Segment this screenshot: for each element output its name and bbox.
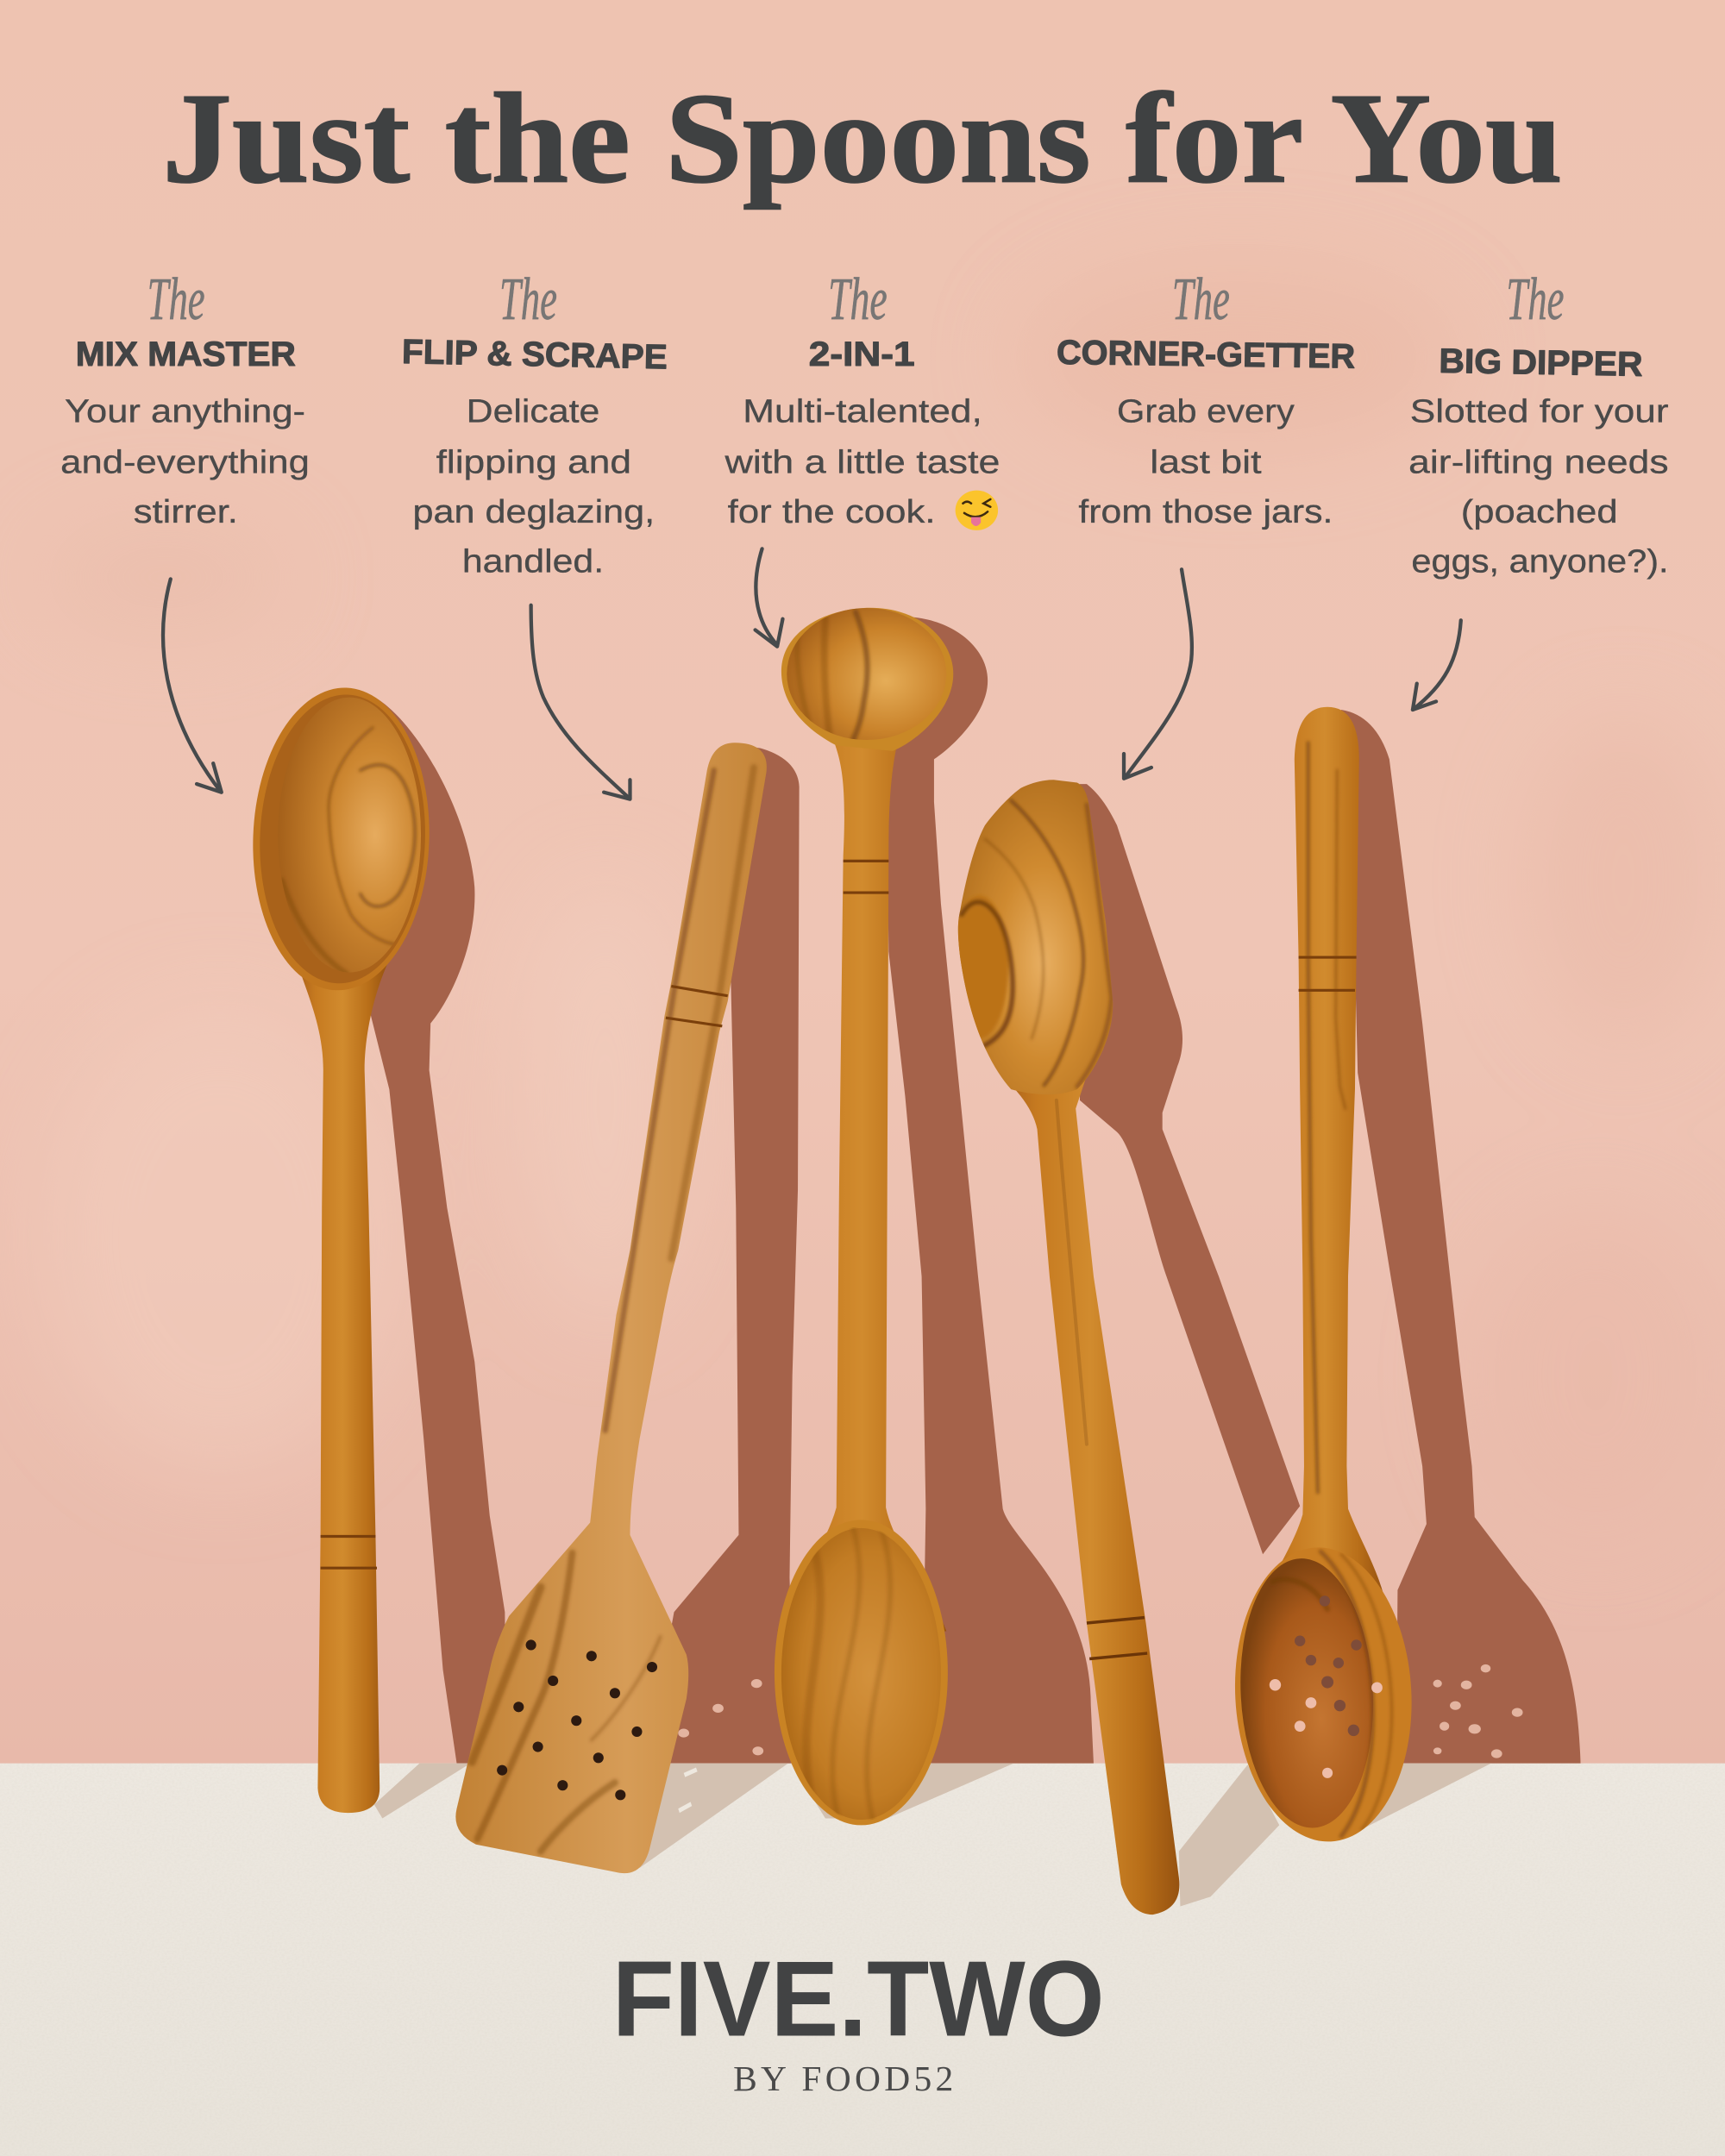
title: Just the Spoons for You (162, 67, 1563, 210)
description: handled. (462, 542, 604, 580)
handle (1001, 1075, 1179, 1915)
description (724, 393, 1000, 530)
description: eggs, anyone?). (1411, 542, 1669, 580)
name: CORNER-GETTER (1057, 334, 1355, 376)
handle grooves (1087, 1618, 1147, 1658)
spatula grain (472, 768, 754, 1852)
arrow: mix master (163, 579, 222, 793)
handle grooves (321, 1536, 377, 1568)
column: two in one (724, 266, 1000, 530)
bowl (248, 685, 435, 993)
cloth weave texture (0, 1764, 1725, 2156)
spoon: flip and scrape spatula (455, 743, 767, 1873)
column: corner getter (1057, 266, 1355, 530)
description (1408, 393, 1669, 580)
description: and-everything (60, 444, 310, 481)
cloth shadow: corner getter (1179, 1764, 1279, 1907)
description: (poached (1461, 493, 1618, 530)
bowl with angled edge (958, 780, 1113, 1094)
cloth shadow: flip and scrape (626, 1764, 788, 1868)
handle (297, 962, 388, 1813)
script the: The (147, 266, 205, 333)
large bowl (775, 1520, 948, 1825)
column: flip and scrape (402, 266, 668, 580)
large bowl grain (806, 1526, 890, 1822)
description: from those jars. (1078, 493, 1333, 530)
description: air-lifting needs (1408, 444, 1669, 481)
cloth shadow: mix master (374, 1764, 470, 1818)
description: for the cook. (728, 493, 936, 530)
arrow: flip and scrape (531, 605, 630, 799)
description (1078, 393, 1333, 530)
name: BIG DIPPER (1439, 342, 1643, 384)
description: Your anything- (65, 393, 305, 430)
arrow: big dipper (1413, 620, 1461, 710)
slotted bowl (1227, 1543, 1419, 1846)
spatula body (455, 743, 767, 1873)
cloth shadow: big dipper (1320, 1764, 1491, 1833)
script the: The (499, 266, 557, 333)
description: stirrer. (134, 493, 238, 530)
handle (777, 729, 946, 1632)
script the: The (1506, 266, 1564, 333)
bowl grain (1272, 1551, 1392, 1836)
spatula holes (497, 1639, 657, 1800)
icon: winking emoji (956, 491, 998, 530)
description (60, 393, 310, 530)
name: 2-IN-1 (809, 335, 915, 373)
cloth shadow: two in one (791, 1764, 1013, 1818)
arrow: corner getter (1124, 569, 1192, 779)
column: big dipper (1408, 266, 1669, 580)
script the: The (828, 266, 888, 333)
light dots on cloth shadow (678, 1767, 698, 1813)
script the: The (1172, 266, 1230, 333)
spoon: big dipper (1227, 707, 1419, 1846)
handle grain (1308, 743, 1346, 1492)
bowl grain (950, 800, 1112, 1087)
small bowl grain (797, 612, 868, 745)
shadow: flip and scrape (647, 745, 800, 1764)
description: Delicate (467, 393, 599, 430)
shadow: two in one (881, 617, 1094, 1764)
column: mix master (60, 266, 310, 530)
description (412, 393, 655, 580)
small tasting bowl (781, 608, 953, 751)
cloth table surface (0, 1764, 1725, 2156)
logo: by food52: BY FOOD52 (733, 2059, 953, 2098)
cast shadows on wall (366, 617, 1581, 1764)
description: Slotted for your (1410, 393, 1669, 430)
description: flipping and (436, 444, 631, 481)
description: with a little taste (724, 444, 1000, 481)
name: MIX MASTER (76, 335, 296, 373)
handle (1265, 707, 1383, 1595)
shadow: mix master (366, 693, 506, 1764)
light dots through the slotted shadows (678, 1664, 1523, 1758)
shadow: big dipper (1341, 710, 1581, 1764)
spatula grooves (666, 987, 728, 1026)
description: last bit (1150, 444, 1262, 481)
arrow: two in one (756, 548, 782, 647)
spoon: corner getter (950, 780, 1179, 1915)
handle grooves (844, 861, 888, 893)
spoon: two in one (775, 608, 953, 1825)
description: Multi-talented, (743, 393, 982, 430)
name: FLIP & SCRAPE (402, 333, 668, 376)
description: Grab every (1117, 393, 1295, 430)
bowl grain (282, 728, 415, 974)
plaster mottling (41, 261, 1720, 1540)
cast shadows on cloth (374, 1764, 1491, 1907)
shadow: corner getter (1080, 784, 1300, 1554)
spoon: mix master (248, 685, 435, 1813)
description: pan deglazing, (412, 493, 655, 530)
logo: five.two: FIVE.TWO (612, 1939, 1105, 2059)
handle grooves (1299, 957, 1357, 990)
handle grain (1057, 1100, 1087, 1445)
slot holes (1295, 1595, 1362, 1736)
